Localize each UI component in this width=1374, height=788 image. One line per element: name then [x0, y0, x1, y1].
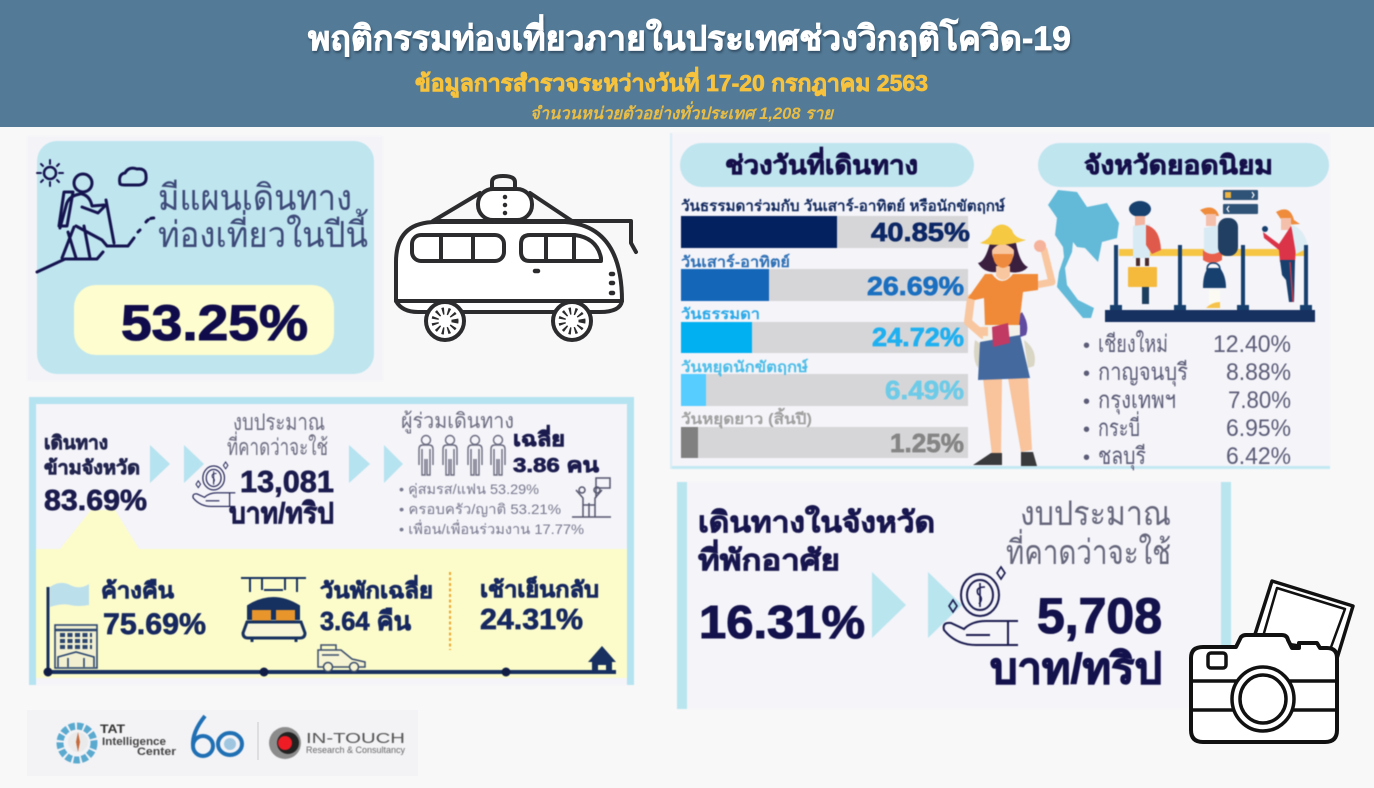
icon: camera with photo — [1191, 581, 1353, 742]
shoes — [973, 452, 1037, 466]
icon: bus with luggage — [396, 176, 636, 340]
logo: 60 years — [193, 716, 242, 756]
waistband — [983, 325, 1020, 342]
footer logos — [27, 710, 418, 776]
legs — [983, 378, 1032, 455]
text: budget: งบประมาณ — [1020, 495, 1171, 533]
icon: hiker — [37, 160, 154, 272]
provinces list: กระบี่ — [1098, 411, 1140, 442]
face — [992, 239, 1014, 265]
panel: plan to travel this year: ท่องเที่ยวในปีนี้ — [158, 208, 369, 255]
text: budget: 5,708 — [1037, 588, 1162, 644]
provinces list: • — [1083, 447, 1090, 469]
book — [992, 323, 1010, 347]
text: budget: ที่คาดว่าจะใช้ — [1006, 529, 1171, 572]
text: average companions: 3.86 คน — [513, 455, 599, 477]
sign — [1223, 190, 1258, 214]
bar chart: travel dates: วันธรรมดา — [681, 306, 760, 323]
logo: IN-TOUCH: IN-TOUCH — [306, 730, 405, 747]
text: companions: ผู้ร่วมเดินทาง — [401, 410, 514, 434]
traveller 3 — [1262, 209, 1308, 302]
provinces list: กาญจนบุรี — [1098, 359, 1188, 387]
text: budget: งบประมาณ — [233, 409, 325, 435]
logo: TAT Intelligence Center: Center — [137, 746, 177, 758]
provinces list: กรุงเทพฯ — [1098, 387, 1176, 415]
subtitle: ข้อมูลการสำรวจระหว่างวันที่ 17-20 กรกฎาคม 2563 — [415, 66, 928, 98]
text: overnight: 75.69% — [103, 608, 206, 641]
companions list: • เพื่อน/เพื่อนร่วมงาน 17.77% — [399, 520, 584, 537]
back hair — [978, 243, 1028, 272]
provinces list: 12.40% — [1213, 331, 1291, 358]
traveller 1 — [1128, 201, 1161, 304]
logo: TAT Intelligence Center — [60, 722, 177, 760]
panel: within home province — [677, 482, 1231, 709]
companions list: • คู่สมรส/แฟน 53.29% — [399, 481, 539, 498]
bar chart: travel dates — [681, 197, 1005, 458]
provinces list — [1083, 330, 1291, 471]
divider — [449, 572, 451, 650]
icon: group with flag — [572, 478, 611, 517]
tote and backpack — [1012, 312, 1027, 340]
sample size note: จำนวนหน่วยตัวอย่างทั่วประเทศ 1,208 ราย — [530, 101, 835, 123]
logo: TAT Intelligence Center: TAT — [100, 722, 126, 736]
text: day trip: เช้าเย็นกลับ — [480, 575, 599, 602]
timeline — [44, 587, 616, 676]
text: cross province share: ข้ามจังหวัด — [44, 457, 140, 479]
bar chart: travel dates: วันหยุดยาว (สิ้นปี) — [681, 407, 812, 429]
illustration: queue of travellers — [1105, 190, 1315, 322]
text: plan to travel: มีแผนเดินทาง — [158, 177, 352, 218]
pill: travel dates: ช่วงวันที่เดินทาง — [725, 146, 918, 180]
title: พฤติกรรมท่องเที่ยวภายในประเทศช่วงวิกฤติโควิด-19 — [308, 14, 1071, 58]
bar chart: travel dates: วันเสาร์-อาทิตย์ — [681, 253, 790, 271]
text: budget: ที่คาดว่าจะใช้ — [227, 431, 328, 460]
provinces list: 6.95% — [1226, 415, 1291, 442]
fringe — [990, 240, 1016, 250]
logo: IN-TOUCH: Research & Consultancy — [306, 745, 405, 756]
text: overnight — [101, 578, 206, 641]
bar chart: travel dates: 1.25% — [890, 428, 964, 458]
platform and posts — [1105, 245, 1315, 322]
bar chart: travel dates: 6.49% — [885, 375, 964, 405]
arms — [968, 298, 983, 335]
text: cross province share: 83.69% — [44, 485, 147, 517]
header banner — [0, 0, 1374, 127]
pill: popular provinces: จังหวัดยอดนิยม — [1084, 150, 1273, 180]
provinces list: • — [1083, 363, 1090, 385]
provinces list: ชลบุรี — [1098, 443, 1146, 471]
companions list: • ครอบครัว/ญาติ 53.21% — [399, 501, 561, 517]
arrows — [872, 572, 962, 638]
icon: coin in hand — [193, 462, 235, 506]
mask — [993, 254, 1013, 268]
text: cross province share — [44, 433, 147, 517]
neck — [996, 266, 1010, 280]
traveller 2 — [1200, 208, 1238, 308]
map of Thailand — [1048, 190, 1119, 318]
text: average companions: เฉลี่ย — [513, 424, 565, 451]
panel: travel dates and popular provinces — [670, 133, 1330, 471]
flag — [50, 583, 89, 607]
logo: TAT Intelligence Center: Intelligence — [102, 736, 166, 748]
companions list — [399, 481, 584, 537]
icon: hotel — [55, 625, 97, 668]
text: budget — [990, 495, 1171, 692]
provinces list: 8.88% — [1226, 359, 1291, 386]
provinces list: เชียงใหม่ — [1098, 330, 1168, 358]
skirt — [978, 335, 1030, 380]
provinces list: • — [1083, 419, 1090, 441]
text: day trip: 24.31% — [480, 604, 583, 636]
panel: cross-province travel — [29, 397, 634, 685]
icon: bed — [241, 578, 306, 642]
arrows — [150, 445, 403, 483]
panel: plan to travel this year — [27, 136, 383, 381]
text: budget — [227, 409, 334, 530]
text: cross province share: เดินทาง — [44, 433, 108, 454]
shirt — [968, 274, 1038, 326]
bar chart: travel dates: วันธรรมดาร่วมกับ วันเสาร์-อาทิตย์ หรือนักขัตฤกษ์ — [681, 197, 1005, 215]
text: average stay: 3.64 คืน — [320, 606, 411, 636]
icon: four people — [419, 436, 505, 475]
text: average stay: วันพักเฉลี่ย — [320, 574, 433, 603]
text: average companions — [513, 424, 599, 477]
icon: coin in hand — [944, 567, 1018, 645]
text: overnight: ค้างคืน — [101, 578, 174, 603]
divider — [258, 722, 259, 760]
yellow strip — [36, 510, 627, 678]
icon: home — [588, 646, 616, 674]
illustration: woman traveller — [968, 224, 1052, 466]
bar chart: travel dates: 26.69% — [867, 271, 964, 301]
bar chart: travel dates: 24.72% — [872, 322, 964, 352]
text: budget: บาท/ทริป — [990, 645, 1162, 692]
icon: car — [318, 645, 365, 672]
provinces list: • — [1083, 335, 1090, 357]
bar chart: travel dates: วันหยุดนักขัตฤกษ์ — [681, 358, 808, 377]
pill: travel dates — [680, 143, 974, 187]
bar chart: travel dates: 40.85% — [871, 217, 970, 247]
logo: IN-TOUCH — [269, 727, 405, 759]
provinces list: • — [1083, 391, 1090, 413]
hat — [980, 224, 1026, 245]
text: within province share: 16.31% — [699, 596, 865, 648]
text: budget: 13,081 — [240, 464, 334, 499]
provinces list: 6.42% — [1226, 443, 1291, 470]
value pill — [74, 285, 334, 355]
provinces list: 7.80% — [1228, 387, 1291, 414]
text: within province share: เดินทางในจังหวัด — [698, 505, 935, 539]
text: within province share: ที่พักอาศัย — [698, 539, 840, 577]
text: average stay — [320, 574, 433, 636]
panel: plan to travel this year: 53.25% — [121, 295, 308, 351]
text: budget: บาท/ทริป — [229, 498, 334, 530]
text: within province share — [698, 505, 935, 648]
pill: popular provinces — [1038, 143, 1329, 187]
text: day trip — [480, 575, 599, 636]
